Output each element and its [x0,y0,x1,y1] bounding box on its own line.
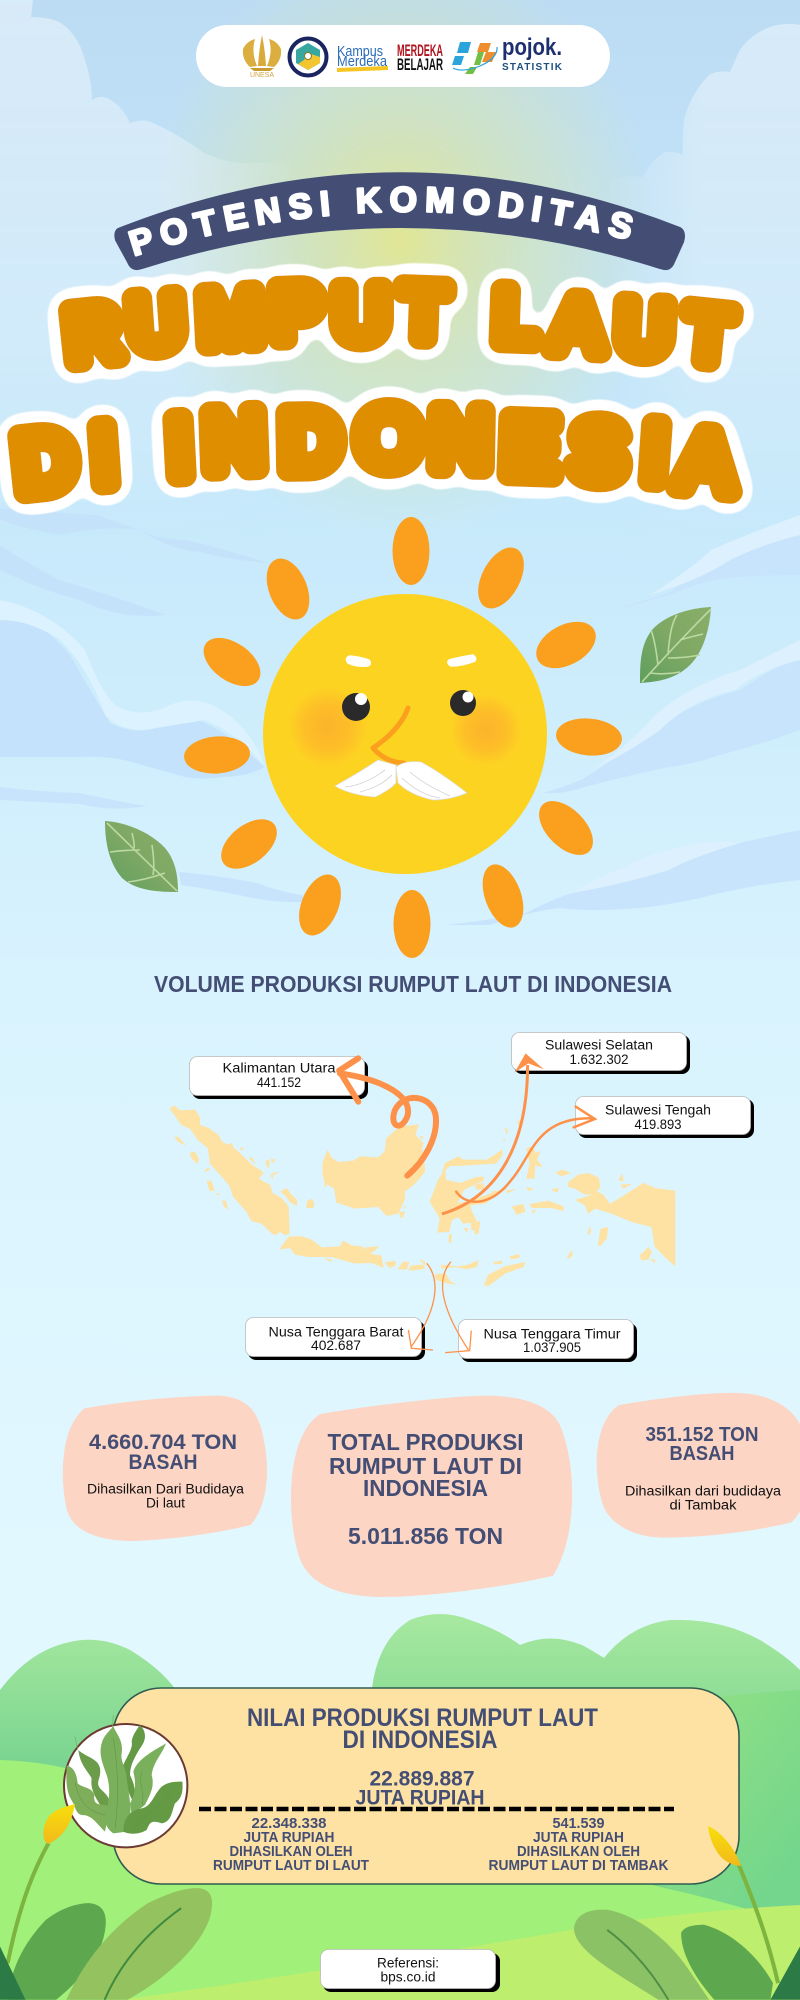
logo: Kampus Merdeka: Kampus [337,44,383,60]
title banner: Potensi Komoditas: POTENSI KOMODITAS [128,186,634,257]
logo: UNESA [243,35,281,79]
column: rumput laut di tambak: RUMPUT LAUT DI TAMBAK [488,1858,669,1874]
label: Sulawesi Selatan: 1.632.302 [570,1052,628,1067]
label: Nusa Tenggara Timur: 1.037.905 [523,1340,581,1355]
eyes [342,690,476,721]
panel: budidaya di laut: BASAH [128,1451,198,1474]
column: rumput laut di tambak: DIHASILKAN OLEH [517,1844,640,1860]
logo: Pojok Statistik: STATISTIK [502,62,563,73]
arrow: to Nusa Tenggara Timur [443,1262,471,1353]
column: rumput laut di laut: DIHASILKAN OLEH [230,1844,352,1860]
column: rumput laut di tambak: 541.539 [552,1816,604,1832]
logo: UNESA: UNESA [250,72,274,79]
panel: budidaya di tambak: di Tambak [670,1498,737,1512]
background sky [0,0,800,946]
label: Nusa Tenggara Timur [458,1320,637,1362]
main title: DI INDONESIA [11,393,738,511]
icon: green leaf left [105,821,178,892]
map: western islands [170,1106,425,1270]
logo: Pojok Statistik [502,34,563,73]
panel: nilai produksi: 22.889.887 [370,1768,474,1790]
panel: budidaya di tambak: 351.152 TON [646,1423,758,1446]
sun illustration [183,517,623,958]
icon: green leaf right [640,607,711,683]
panel: nilai produksi [113,1688,739,1884]
label: Sulawesi Selatan [512,1032,690,1074]
label: Nusa Tenggara Barat [246,1318,425,1360]
label: Nusa Tenggara Timur: Nusa Tenggara Timur [484,1326,621,1342]
panel: total produksi: RUMPUT LAUT DI [329,1453,522,1479]
panel: budidaya di tambak: BASAH [670,1442,734,1465]
column: rumput laut di laut: JUTA RUPIAH [244,1830,334,1846]
panel: nilai produksi: NILAI PRODUKSI RUMPUT LAUT [247,1704,598,1732]
label: Nusa Tenggara Barat: Nusa Tenggara Barat [268,1324,404,1340]
panel: total produksi: INDONESIA [363,1475,488,1501]
sun rays [183,517,623,958]
eyebrows [346,655,476,666]
reference box: bps.co.id [380,1970,436,1984]
logo: Kampus Merdeka: Merdeka [337,54,388,70]
logo bar [196,25,610,87]
icon: yellow flower bud right [708,1826,741,1866]
panel: budidaya di laut: 4.660.704 TON [89,1431,237,1454]
moustache [335,760,467,800]
map of Indonesia [170,1106,675,1286]
column: rumput laut di tambak [488,1816,669,1874]
icon: seaweed in circle [64,1715,187,1847]
logo: BPS [452,42,497,74]
panel: total produksi: TOTAL PRODUKSI [328,1429,524,1455]
label: Sulawesi Tengah: Sulawesi Tengah [605,1102,711,1118]
icon: yellow flower bud left [43,1804,75,1844]
sun face disc [263,594,547,874]
column: rumput laut di laut: RUMPUT LAUT DI LAUT [213,1858,369,1874]
label: Sulawesi Selatan: Sulawesi Selatan [545,1038,653,1052]
panel: budidaya di laut: Dihasilkan Dari Budidaya [87,1482,245,1496]
nose [373,708,408,763]
column: rumput laut di laut [213,1816,369,1874]
reference box [320,1950,500,1992]
panel: total produksi: 5.011.856 TON [348,1523,503,1549]
panel: budidaya di tambak: Dihasilkan dari budidaya [625,1484,782,1498]
arrow: to Nusa Tenggara Barat [408,1263,435,1350]
column: rumput laut di laut: 22.348.338 [252,1816,326,1832]
panel: budidaya di laut [64,1397,266,1540]
label: Kalimantan Utara: Kalimantan Utara [222,1060,336,1076]
arrow: to Kalimantan Utara [339,1058,436,1176]
panel: nilai produksi: DI INDONESIA [342,1726,498,1754]
label: Nusa Tenggara Barat: 402.687 [311,1338,361,1353]
panel: budidaya di tambak [598,1394,800,1537]
panel: budidaya di laut: Di laut [146,1496,185,1510]
logo: Merdeka Belajar: MERDEKA [397,41,443,60]
label: Kalimantan Utara: 441.152 [257,1075,301,1090]
logo: Kampus Merdeka [337,44,388,72]
panel: nilai produksi: JUTA RUPIAH [356,1786,484,1810]
arrow: to Sulawesi Tengah [456,1107,595,1202]
cheeks [288,687,522,767]
main title: RUMPUT LAUT [62,270,735,379]
logo: Merdeka Belajar: BELAJAR [397,55,443,74]
arrow: to Sulawesi Selatan [442,1053,544,1214]
panel: total produksi [292,1397,571,1596]
label: Sulawesi Tengah [576,1096,754,1138]
heading: volume produksi: VOLUME PRODUKSI RUMPUT LAUT DI INDONESIA [154,971,672,997]
main title [11,270,738,511]
logo: campus seal [290,38,326,76]
column: rumput laut di tambak: JUTA RUPIAH [533,1830,624,1846]
plant: left leaves and flower [0,1843,212,2000]
label: Kalimantan Utara [190,1056,368,1099]
plant: right leaves and flower stem [574,1865,800,2000]
map: eastern islands [430,1121,675,1286]
logo: Merdeka Belajar [397,41,443,74]
logo: Pojok Statistik: pojok. [502,34,562,61]
landscape hills [0,1614,800,2000]
label: Sulawesi Tengah: 419.893 [634,1117,682,1132]
reference box: Referensi: [377,1956,439,1970]
